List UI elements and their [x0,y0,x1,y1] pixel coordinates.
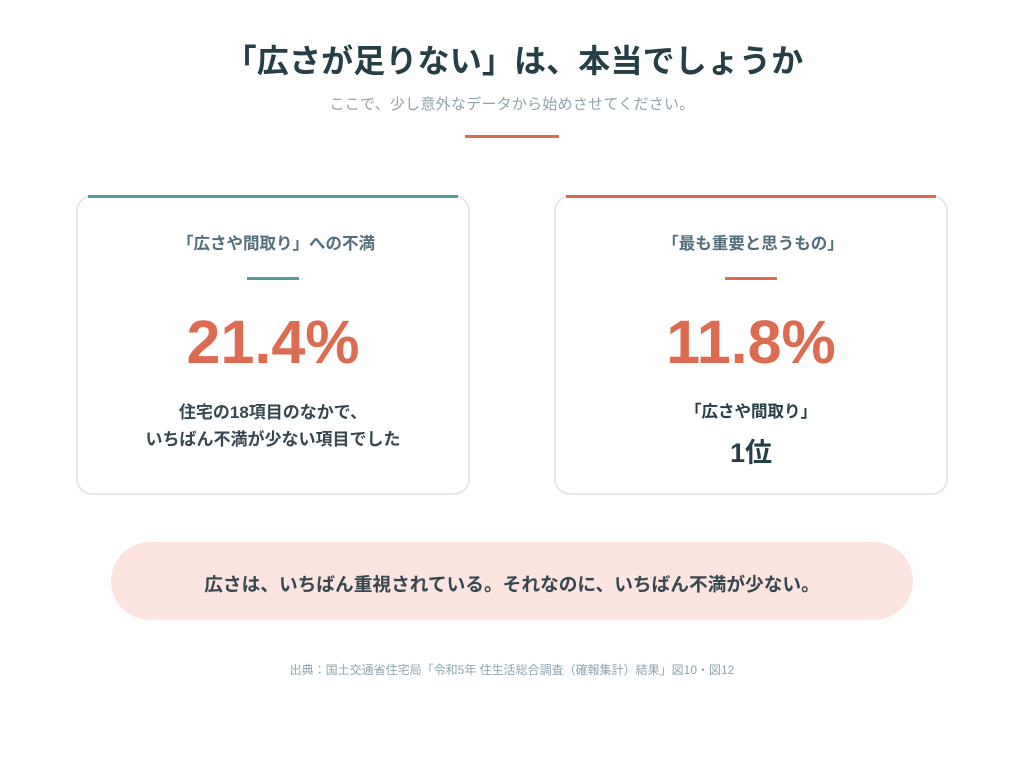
rank: 1位 [730,438,772,468]
title: 「広さが足りない」は、本当でしょうか [225,43,803,79]
panel: most important [554,195,948,495]
description [146,403,400,449]
description: 住宅の18項目のなかで、 [179,403,367,422]
panel: dissatisfaction [76,195,470,495]
panel accent rule [725,277,777,280]
panel top bar [566,195,936,198]
title accent rule [465,135,559,138]
description: いちばん不満が少ない項目でした [146,430,400,449]
panel accent rule [247,277,299,280]
callout [111,542,913,620]
item label: 「広さや間取り」 [685,403,817,421]
big number: 21.4% [187,308,359,376]
panel label: 「広さや間取り」への不満 [177,235,375,253]
big number: 11.8% [666,308,836,376]
panel top bar [88,195,458,198]
panel label: 「最も重要と思うもの」 [662,235,844,253]
source note: 出典：国土交通省住宅局「令和5年 住生活総合調査（確報集計）結果」図10・図12 [290,663,734,677]
subtitle: ここで、少し意外なデータから始めさせてください。 [330,96,694,113]
callout text: 広さは、いちばん重視されている。それなのに、いちばん不満が少ない。 [204,574,820,595]
